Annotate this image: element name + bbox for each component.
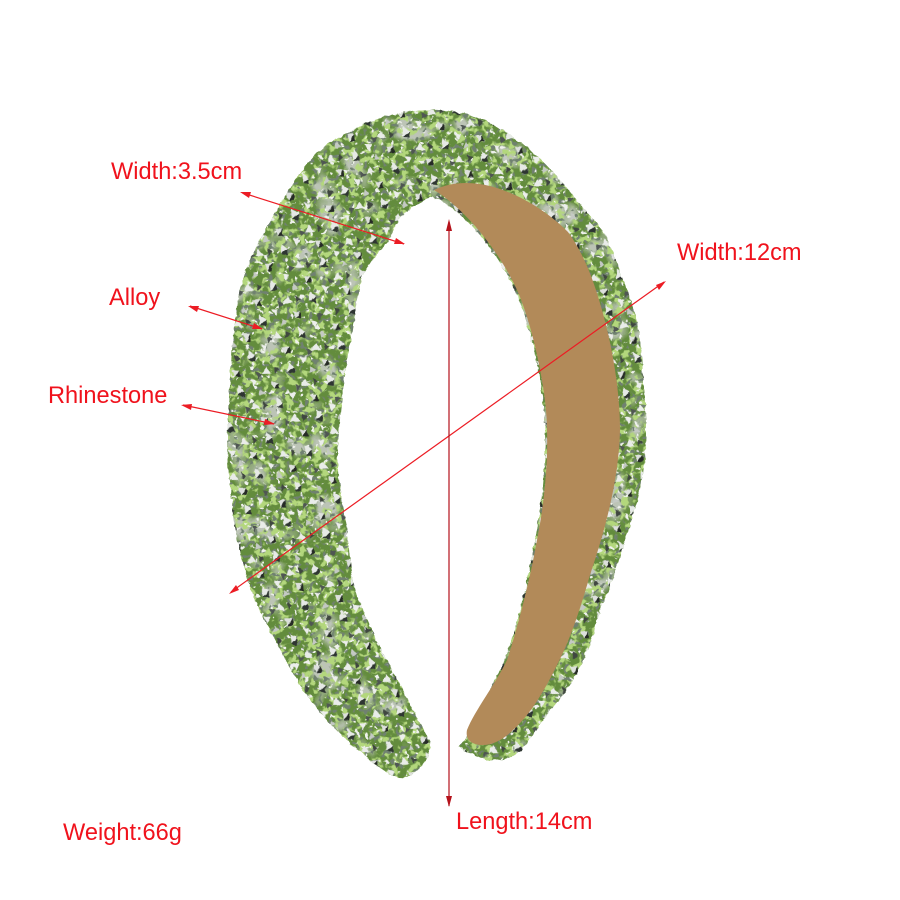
label: Weight 66g: Weight:66g — [63, 820, 182, 846]
arrow: length 14cm — [446, 219, 452, 807]
arrow: width 3.5cm — [240, 192, 405, 244]
arrow: width 12cm — [229, 281, 666, 594]
arrow: alloy — [188, 306, 263, 329]
label: Width 3.5cm: Width:3.5cm — [111, 159, 242, 185]
arrow: rhinestone — [181, 404, 275, 425]
label: Width 12cm: Width:12cm — [677, 240, 802, 266]
jewelled outer band — [220, 100, 655, 785]
headband — [220, 100, 655, 785]
label: Length 14cm: Length:14cm — [456, 809, 592, 835]
label: Alloy: Alloy — [109, 285, 160, 311]
label: Rhinestone: Rhinestone — [48, 383, 167, 409]
tan suede inner lining — [434, 183, 620, 745]
